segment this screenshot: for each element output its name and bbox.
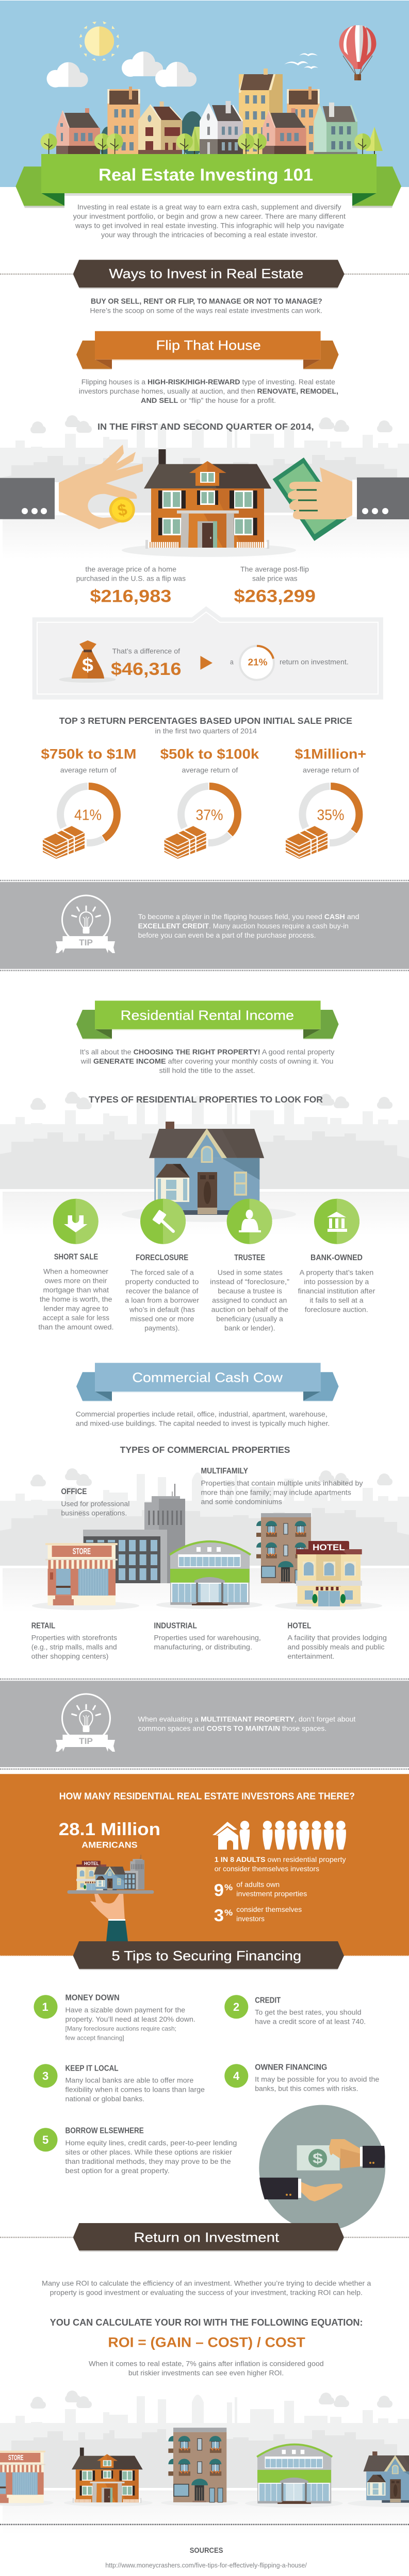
building shadows: [32, 1601, 382, 1610]
illustration: industrial building: [170, 1541, 251, 1605]
roi description: [42, 2279, 371, 2297]
tip 4: owner financing: [224, 2063, 380, 2093]
heading ribbon: 5 tips: 5 Tips to Securing Financing: [111, 1948, 301, 1963]
flip description: investors purchase homes, usually at auction, and then RENOVATE, REMODEL,: [79, 387, 338, 395]
tip 1: money down: MONEY DOWN: [65, 1994, 120, 2003]
illustration: hands exchanging money: $: [313, 2150, 323, 2166]
stat: 3 percent: investors: [236, 1914, 265, 1923]
tip 5: borrow elsewhere: sites or other places. While these options are riskier: [65, 2148, 232, 2156]
rental description: [80, 1048, 334, 1075]
illustration: bottom street of buildings: [0, 2428, 409, 2507]
tip 2: credit: [224, 1995, 366, 2026]
item: bank-owned: foreclosure auction.: [305, 1306, 368, 1314]
illustration: office building: [83, 1484, 185, 1583]
text: hotel: HOTEL: [287, 1621, 311, 1630]
stat column: 50k to 100k, 37 percent: 37%: [196, 807, 223, 824]
stat column: 1 million plus, 35 percent: $1Million+: [295, 747, 366, 762]
illustration: right hand holding cash: [273, 457, 409, 541]
title text: Real Estate Investing 101: [99, 165, 313, 184]
roi note: [89, 2359, 324, 2377]
heading: types of commercial properties: TYPES OF COMMERCIAL PROPERTIES: [120, 1445, 290, 1455]
tip 5: borrow elsewhere: than traditional methods, they may prove to be the: [65, 2157, 231, 2165]
tip panel: flipping: TIP: [79, 938, 93, 947]
tip 3: keep it local: Many local banks are able to offer more: [65, 2076, 194, 2084]
text: retail: RETAIL: [31, 1621, 55, 1630]
illustration: hand holding tray of buildings: [67, 1855, 154, 1941]
illustration: house shadow: [122, 544, 296, 557]
tip 1: money down: 1: [42, 2001, 48, 2013]
callout: difference and return: [32, 606, 383, 700]
panel: how many investors: [0, 1774, 409, 1956]
stat column: 1 million plus, 35 percent: average return of: [303, 766, 359, 774]
stat: average purchase price: the average price of a home: [85, 565, 176, 573]
text: office: Used for professional: [61, 1499, 129, 1507]
illustration: flip house: [144, 449, 271, 549]
subheading: buy or sell: BUY OR SELL, RENT OR FLIP, TO MANAGE OR NOT TO MANAGE?: [91, 297, 322, 306]
text: industrial: manufacturing, or distributing.: [154, 1642, 252, 1651]
roi note: but riskier investments can see even higher ROI.: [128, 2368, 284, 2377]
illustration: clouds: [46, 52, 197, 88]
stat: average purchase price: [76, 565, 186, 606]
commercial description: Commercial properties include retail, office, industrial, apartment, warehouse,: [76, 1410, 328, 1418]
tip panel: flipping: EXCELLENT CREDIT. Many auction houses require a cash buy-in: [138, 922, 349, 930]
item: short sale: the home is worth, the: [40, 1295, 112, 1303]
stat column: 50k to 100k, 37 percent: $50k to $100k: [160, 747, 259, 762]
item: trustee: assigned to conduct an: [212, 1296, 287, 1304]
roi description: Many use ROI to calculate the efficiency of an investment. Whether you’re trying to decide whether a: [42, 2279, 371, 2287]
stat: 9 percent: of adults own: [236, 1880, 280, 1889]
heading ribbon: return on investment: Return on Investment: [134, 2230, 280, 2245]
item: short sale: lender may agree to: [43, 1304, 108, 1313]
stat: 3 percent: consider themselves: [236, 1905, 302, 1913]
intro paragraph: [73, 203, 346, 239]
item: short sale: [38, 1199, 114, 1331]
skyline background: commercial section: [0, 1468, 409, 1612]
item: trustee: bank or lender).: [224, 1324, 275, 1332]
ribbon: flip that house: [76, 331, 339, 370]
item: short sale: accept a sale for less: [42, 1314, 109, 1322]
item: trustee: Used in some states: [218, 1268, 283, 1277]
tip 1: money down: [34, 1994, 195, 2041]
heading ribbon: return on investment: [0, 2223, 409, 2252]
chart: 21 percent ring: [240, 646, 274, 680]
illustration: row of houses: [41, 69, 383, 162]
icon: person at podium: [227, 1199, 272, 1244]
stat: average post-flip price: [234, 565, 316, 606]
item: bank-owned: A property that’s taken: [300, 1268, 373, 1277]
stat column: 750k to 1M, 41 percent: 41%: [74, 807, 102, 824]
tip panel: multitenant: When evaluating a MULTITENANT PROPERTY, don’t forget about: [138, 1715, 355, 1723]
tip 3: keep it local: KEEP IT LOCAL: [65, 2064, 119, 2073]
item: foreclosure: who’s in default (has: [129, 1306, 195, 1314]
commercial description: and mixed-use buildings. The capital needed to invest is typically much higher.: [76, 1419, 330, 1427]
stat: 3 percent: 3: [214, 1906, 224, 1925]
icon: house and eight people: [212, 1821, 346, 1850]
rental description: will GENERATE INCOME after covering your monthly costs of owning it. You: [80, 1057, 333, 1065]
stat column: 1 million plus, 35 percent: 35%: [317, 807, 345, 824]
text: hotel: and possibly meals and public: [287, 1642, 385, 1651]
item: short sale: When a homeowner: [43, 1267, 108, 1276]
illustration: left hand holding coin: [0, 445, 143, 529]
heading: roi equation: YOU CAN CALCULATE YOUR ROI WITH THE FOLLOWING EQUATION:: [50, 2317, 363, 2328]
tip 4: owner financing: It may be possible for you to avoid the: [255, 2075, 380, 2083]
tip 5: borrow elsewhere: Home equity lines, credit cards, peer-to-peer lending: [65, 2139, 237, 2147]
stat column: 50k to 100k, 37 percent: average return of: [182, 766, 238, 774]
illustration: birds: [284, 53, 318, 69]
tip 4: owner financing: OWNER FINANCING: [255, 2063, 327, 2072]
item: trustee: beneficiary (usually a: [216, 1315, 283, 1323]
tip 2: credit: have a credit score of at least 740.: [255, 2018, 366, 2026]
skyline background: residential section: [0, 1092, 409, 1235]
item: foreclosure: payments).: [144, 1324, 179, 1332]
text: industrial: INDUSTRIAL: [154, 1621, 197, 1630]
item: foreclosure: [125, 1199, 199, 1332]
tip 5: borrow elsewhere: [34, 2127, 237, 2175]
skyline background: roi section: [0, 2391, 409, 2534]
illustration: hand holding tray of buildings: HOTEL: [84, 1861, 99, 1867]
text: hotel: entertainment.: [287, 1652, 334, 1660]
text: multifamily: more than one family; may include apartments: [201, 1488, 351, 1496]
item: short sale: than the amount owed.: [38, 1323, 114, 1331]
flip description: [79, 378, 338, 404]
stat column: 750k to 1M, 41 percent: average return of: [60, 766, 117, 774]
subheading: buy or sell: [90, 297, 322, 315]
illustration: sun: [79, 21, 120, 62]
icon: arrow: [200, 656, 212, 670]
callout: difference and return: a: [230, 657, 234, 666]
item: foreclosure: The forced sale of a: [130, 1268, 194, 1277]
item: foreclosure: FORECLOSURE: [136, 1253, 188, 1262]
item: trustee: [210, 1199, 289, 1332]
stat: 9 percent: [214, 1880, 307, 1900]
intro paragraph: ways to get involved in real estate investing. This infographic will help you navigate: [75, 222, 344, 230]
tip 4: owner financing: banks, but this comes with risks.: [255, 2084, 358, 2093]
sources: SOURCES: [190, 2547, 223, 2555]
text: retail: (e.g., strip malls, malls and: [31, 1642, 117, 1651]
item: short sale: SHORT SALE: [54, 1252, 98, 1261]
tip 1: money down: few accept financing]: [65, 2034, 124, 2041]
tip 3: keep it local: 3: [42, 2070, 48, 2082]
sky background: [0, 1, 409, 187]
icon: gavel: [140, 1199, 186, 1244]
item: trustee: because a trustee is: [218, 1287, 282, 1295]
heading: first and second quarter: IN THE FIRST AND SECOND QUARTER OF 2014,: [97, 421, 314, 432]
heading ribbon: ways to invest: [0, 260, 409, 289]
heading: top 3 return percentages: in the first two quarters of 2014: [155, 726, 257, 735]
stat column: 750k to 1M, 41 percent: [41, 747, 137, 860]
stat: 9 percent: %: [224, 1883, 233, 1892]
roi description: property is good investment or evaluating the success of your investment, tracking ROI can help.: [50, 2289, 363, 2297]
item: short sale: mortgage than what: [43, 1286, 109, 1294]
tip 2: credit: 2: [233, 2001, 239, 2013]
intro paragraph: Investing in real estate is a great way to earn extra cash, supplement and diversify: [77, 203, 341, 211]
text: office: [61, 1487, 129, 1517]
tip panel: flipping: [0, 880, 409, 971]
stat column: 1 million plus, 35 percent: [285, 747, 366, 860]
illustration: multifamily building: [256, 1513, 311, 1583]
text: multifamily: and some condominiums: [201, 1497, 282, 1505]
stat: 28.1 million: AMERICANS: [81, 1840, 138, 1850]
commercial description: [76, 1410, 330, 1427]
text: retail: other shopping centers): [31, 1652, 108, 1660]
stat: 28.1 million: 28.1 Million: [59, 1820, 160, 1839]
roi formula: ROI = (GAIN – COST) / COST: [108, 2335, 305, 2350]
tip panel: multitenant: TIP: [79, 1736, 93, 1746]
item: foreclosure: property conducted to: [125, 1278, 199, 1286]
text: multifamily: MULTIFAMILY: [201, 1467, 249, 1476]
stat column: 50k to 100k, 37 percent: [160, 747, 259, 860]
stat: average post-flip price: $263,299: [234, 586, 316, 606]
text: retail: [31, 1621, 117, 1660]
tip panel: flipping: To become a player in the flipping houses field, you need CASH and: [138, 912, 359, 921]
item: foreclosure: recover the balance of: [126, 1287, 199, 1295]
intro paragraph: your way through the intricacies of becoming a real estate investor.: [101, 231, 318, 239]
item: bank-owned: it fails to sell at a: [309, 1296, 364, 1304]
rental description: It’s all about the CHOOSING THE RIGHT PROPERTY! A good rental property: [80, 1048, 334, 1056]
item: bank-owned: [298, 1199, 375, 1314]
illustration: hands exchanging money: [259, 2105, 385, 2231]
item: trustee: instead of “foreclosure,”: [210, 1278, 289, 1286]
text: hotel: [287, 1621, 387, 1660]
item: trustee: TRUSTEE: [234, 1253, 265, 1262]
illustration: bottom street of buildings: STORE: [8, 2454, 24, 2462]
ribbon: residential rental income: Residential Rental Income: [121, 1007, 294, 1023]
item: bank-owned: BANK-OWNED: [310, 1253, 363, 1262]
item: bank-owned: financial institution after: [298, 1287, 375, 1295]
tip 5: borrow elsewhere: 5: [42, 2133, 48, 2146]
item: foreclosure: missed one or more: [130, 1315, 194, 1323]
tip panel: multitenant: common spaces and COSTS TO MAINTAIN those spaces.: [138, 1724, 326, 1733]
tip 3: keep it local: national or global banks.: [65, 2095, 144, 2103]
stat: 1 in 8 adults: [215, 1855, 346, 1873]
tip 1: money down: property. You’ll need at least 20% down.: [65, 2015, 195, 2023]
flip description: AND SELL or “flip” the house for a profit.: [141, 396, 276, 404]
illustration: store: [45, 1543, 118, 1605]
callout: difference and return: return on investment.: [280, 657, 349, 666]
icon: bank: [314, 1199, 359, 1244]
tip panel: multitenant: [0, 1679, 409, 1769]
heading ribbon: 5 tips: [73, 1941, 344, 1970]
intro paragraph: your investment portfolio, or begin and grow a new career. There are many different: [73, 212, 346, 221]
heading ribbon: ways to invest: Ways to Invest in Real Estate: [109, 266, 303, 281]
stat: 1 in 8 adults: 1 IN 8 ADULTS own residential property: [215, 1855, 346, 1863]
illustration: hotel: [296, 1541, 362, 1606]
illustration: store: STORE: [73, 1547, 91, 1556]
ribbon: commercial cash cow: Commercial Cash Cow: [132, 1369, 283, 1385]
item: trustee: auction on behalf of the: [211, 1306, 288, 1314]
text: office: OFFICE: [61, 1487, 87, 1496]
stat column: 750k to 1M, 41 percent: $750k to $1M: [41, 747, 137, 762]
stat: 9 percent: 9: [214, 1880, 224, 1900]
text: office: business operations.: [61, 1509, 127, 1517]
item: foreclosure: a loan from a borrower: [125, 1296, 199, 1304]
heading: top 3 return percentages: TOP 3 RETURN PERCENTAGES BASED UPON INITIAL SALE PRICE: [59, 716, 352, 726]
text: multifamily: [201, 1467, 363, 1505]
subheading: buy or sell: Here’s the scoop on some of the ways real estate investments can work.: [90, 307, 322, 315]
illustration: house shadow: [122, 1207, 296, 1222]
heading: types of residential properties: TYPES OF RESIDENTIAL PROPERTIES TO LOOK FOR: [89, 1094, 323, 1105]
text: industrial: [154, 1621, 261, 1651]
stat: average purchase price: $216,983: [90, 586, 171, 606]
ribbon: commercial cash cow: [76, 1363, 339, 1402]
tip 5: borrow elsewhere: best option for a great property.: [65, 2166, 170, 2175]
title ribbon: [15, 154, 401, 208]
tip 2: credit: To get the best rates, you should: [255, 2008, 362, 2016]
tip 2: credit: CREDIT: [255, 1996, 281, 2005]
stat: 9 percent: investment properties: [236, 1890, 307, 1898]
text: multifamily: Properties that contain multiple units inhabited by: [201, 1479, 363, 1487]
stat: 3 percent: [214, 1905, 302, 1925]
icon: money bag: $: [82, 654, 93, 675]
ribbon: flip that house: Flip That House: [156, 337, 261, 353]
rental description: still hold the title to the asset.: [159, 1066, 255, 1075]
roi note: When it comes to real estate, 7% gains after inflation is considered good: [89, 2359, 324, 2367]
flip description: Flipping houses is a HIGH-RISK/HIGH-REWARD type of investing. Real estate: [81, 378, 335, 386]
heading: top 3 return percentages: [59, 716, 352, 735]
tip 1: money down: Have a sizable down payment for the: [65, 2006, 185, 2014]
text: industrial: Properties used for warehousing,: [154, 1633, 261, 1641]
divider: [0, 2524, 409, 2525]
tip 1: money down: [Many foreclosure auctions require cash;: [65, 2025, 176, 2032]
icon: money bag: [59, 640, 116, 683]
icon: down arrow: [53, 1199, 99, 1244]
stat: 3 percent: %: [224, 1908, 233, 1918]
sources: [29, 2547, 384, 2576]
stat: average post-flip price: sale price was: [252, 574, 298, 582]
tip panel: flipping: before you can even be a part of the purchase process.: [138, 931, 316, 939]
stat: average purchase price: purchased in the U.S. as a flip was: [76, 574, 186, 582]
ribbon: residential rental income: [76, 1001, 339, 1040]
callout: difference and return: That’s a difference of: [112, 647, 180, 655]
tip 3: keep it local: flexibility when it comes to loans than large: [65, 2086, 205, 2094]
skyline background: flip section: [0, 415, 409, 559]
callout: difference and return: $46,316: [111, 659, 182, 679]
item: short sale: owes more on their: [44, 1277, 107, 1285]
tip 3: keep it local: [34, 2064, 205, 2103]
text: hotel: A facility that provides lodging: [287, 1633, 387, 1641]
item: bank-owned: into possession by a: [304, 1278, 369, 1286]
sources: http://www.moneycrashers.com/five-tips-for-effectively-flipping-a-house/: [105, 2562, 307, 2569]
illustration: left hand holding coin: $: [116, 500, 129, 520]
tip 4: owner financing: 4: [233, 2070, 240, 2082]
heading: HOW MANY RESIDENTIAL REAL ESTATE INVESTORS ARE THERE?: [59, 1791, 355, 1801]
text: retail: Properties with storefronts: [31, 1633, 117, 1641]
tip 5: borrow elsewhere: BORROW ELSEWHERE: [65, 2127, 144, 2136]
chart: 21 percent ring: 21%: [248, 657, 267, 668]
illustration: blue house: [149, 1122, 264, 1215]
stat: average post-flip price: The average post-flip: [240, 565, 309, 573]
stat: 28.1 million: [59, 1820, 160, 1850]
stat: 1 in 8 adults: or consider themselves investors: [215, 1865, 319, 1873]
illustration: hotel: HOTEL: [313, 1543, 345, 1552]
illustration: hot air balloon: [339, 25, 377, 80]
